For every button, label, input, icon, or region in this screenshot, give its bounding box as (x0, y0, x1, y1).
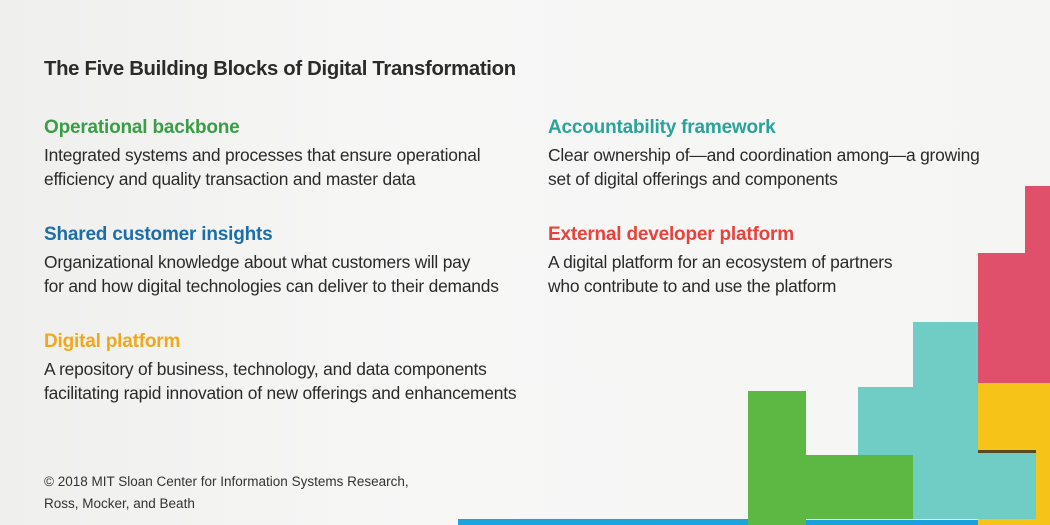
block: shared customer insights (44, 224, 499, 296)
copyright (44, 474, 409, 511)
block: blue right (806, 520, 978, 525)
block: accountability framework: set of digital offerings and components (548, 169, 838, 189)
block: shared customer insights: for and how digital technologies can deliver to their demands (44, 276, 499, 296)
block: blue left (458, 519, 748, 525)
block: green (748, 391, 921, 525)
block: pink (978, 186, 1050, 383)
block: external developer platform: External developer platform (548, 224, 794, 245)
block: external developer platform: who contribute to and use the platform (548, 276, 836, 296)
block: shared customer insights: Organizational knowledge about what customers will pay (44, 252, 470, 272)
title: The Five Building Blocks of Digital Transformation (44, 58, 516, 80)
block: accountability framework: Clear ownership of—and coordination among—a growing (548, 145, 980, 165)
copyright: © 2018 MIT Sloan Center for Information Systems Research, (44, 474, 409, 489)
block: digital platform (44, 331, 516, 403)
block: teal (858, 322, 1036, 519)
block: accountability framework (548, 117, 980, 189)
block: digital platform: facilitating rapid innovation of new offerings and enhancements (44, 383, 516, 403)
block: operational backbone: Integrated systems and processes that ensure operational (44, 145, 480, 165)
block: operational backbone: Operational backbone (44, 117, 240, 138)
copyright: Ross, Mocker, and Beath (44, 496, 195, 511)
block: operational backbone: efficiency and quality transaction and master data (44, 169, 416, 189)
block: external developer platform: A digital platform for an ecosystem of partners (548, 252, 892, 272)
block: operational backbone (44, 117, 480, 189)
block: accountability framework: Accountability framework (548, 117, 775, 138)
block: digital platform: Digital platform (44, 331, 180, 352)
block: shared customer insights: Shared customer insights (44, 224, 273, 245)
block: digital platform: A repository of business, technology, and data components (44, 359, 487, 379)
block: yellow (978, 383, 1050, 525)
block: external developer platform (548, 224, 892, 296)
